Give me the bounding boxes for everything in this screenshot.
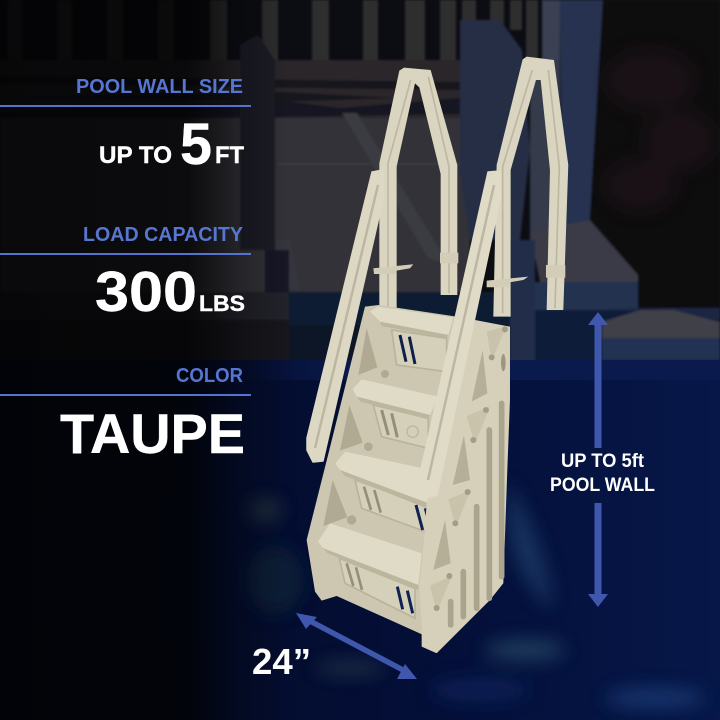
value: taupe: TAUPE [60,402,245,465]
value: up to 5ft: FT [215,142,244,169]
step 3 [335,452,430,533]
step 1 [370,307,453,372]
arrow: step width [296,613,417,679]
back ladder rails [373,57,568,317]
value: up to 5ft: UP TO [99,142,172,169]
arrow: pool wall height bottom [588,503,608,607]
arrow: pool wall height top [588,312,608,448]
step 4 [318,523,422,618]
step 2 [353,379,438,448]
value: 300 lbs [95,260,245,324]
label: up to 5ft pool wall [550,451,655,496]
ladder steps [307,305,510,653]
value: 300 lbs: 300 [95,260,197,324]
value: 300 lbs: LBS [199,291,245,316]
back left rail [379,68,457,313]
heading: pool wall size: POOL WALL SIZE [76,76,243,98]
left side recesses [323,328,389,526]
stair body [307,305,457,635]
divider: pool wall size [0,105,251,107]
right handrail [417,171,501,498]
divider: load capacity [0,253,251,255]
value: up to 5ft [99,112,244,177]
back right rail [493,57,568,317]
left handrail [307,170,384,462]
value: up to 5ft: 5 [180,112,212,177]
right side panel [419,320,510,653]
heading: load capacity: LOAD CAPACITY [83,224,244,246]
divider: color [0,394,251,396]
label: 24 inch width: 24” [252,641,311,682]
label: up to 5ft pool wall: POOL WALL [550,475,655,496]
heading: color: COLOR [176,365,244,387]
rail clips [373,253,565,287]
label: up to 5ft pool wall: UP TO 5ft [561,451,645,472]
